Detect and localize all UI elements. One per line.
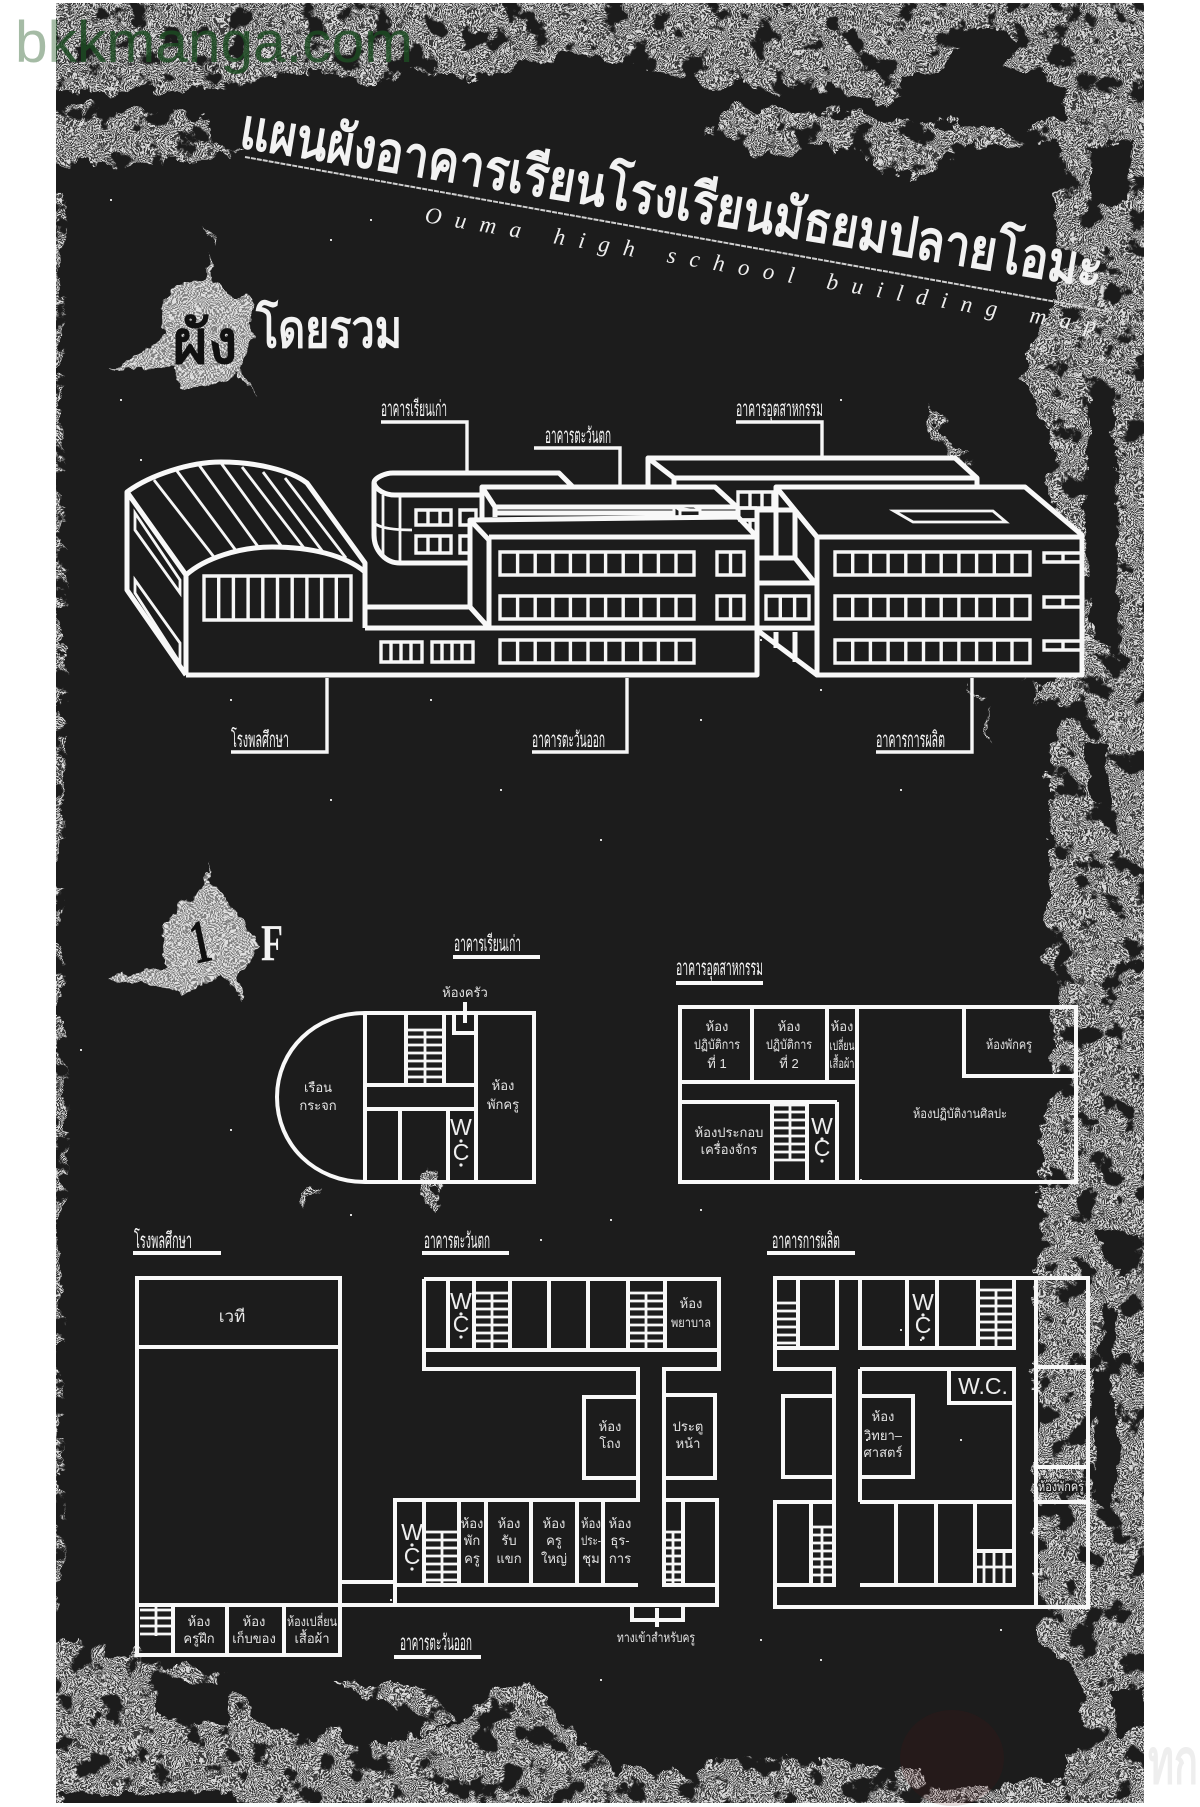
room labels: ศาสตร์ bbox=[864, 1445, 902, 1460]
building: old block bbox=[374, 473, 572, 563]
label: อาคารการผลิต bbox=[772, 1228, 840, 1253]
walls bbox=[680, 1007, 1076, 1182]
building: gymnasium bbox=[127, 462, 757, 675]
room labels: ห้อง bbox=[243, 1614, 265, 1629]
wc: W bbox=[811, 1113, 833, 1139]
room labels: ปฏิบัติการ bbox=[694, 1037, 740, 1052]
icon: ink blot bbox=[107, 860, 258, 1003]
room labels: ห้อง bbox=[498, 1516, 520, 1531]
room labels bbox=[299, 985, 519, 1113]
building: central connector bbox=[738, 487, 817, 628]
room labels: ห้อง bbox=[581, 1516, 601, 1531]
room labels: ห้อง bbox=[492, 1078, 514, 1093]
room labels bbox=[863, 1409, 1084, 1495]
room labels: พักครู bbox=[487, 1097, 519, 1113]
building: industrial block bbox=[648, 458, 977, 560]
wc bbox=[912, 1289, 1008, 1399]
room labels: ห้องครัว bbox=[442, 985, 488, 1000]
room labels: กระจก bbox=[299, 1098, 337, 1113]
wc: W bbox=[401, 1519, 423, 1545]
wc: C bbox=[453, 1311, 469, 1337]
dust specks bbox=[80, 200, 1002, 1680]
callout: production block bbox=[876, 678, 972, 752]
callouts on the perspective drawing bbox=[231, 396, 972, 752]
wc: C bbox=[453, 1139, 469, 1165]
building: production block bbox=[776, 487, 1082, 675]
callout: industrial block bbox=[736, 396, 823, 457]
callout: west block: อาคารตะวันตก bbox=[545, 423, 611, 448]
wc bbox=[811, 1113, 833, 1163]
title rule bbox=[245, 157, 1113, 312]
label bbox=[676, 955, 763, 983]
heading text: F bbox=[261, 915, 283, 972]
floor plan: old block bbox=[277, 931, 540, 1182]
room labels: ห้องพักครู bbox=[986, 1037, 1032, 1053]
callout: production block: อาคารการผลิต bbox=[876, 727, 945, 752]
room labels: ที่ 1 bbox=[707, 1055, 727, 1071]
room labels bbox=[461, 1296, 711, 1646]
room labels: ห้อง bbox=[599, 1419, 621, 1434]
wc: C bbox=[404, 1543, 420, 1569]
stairs bbox=[406, 1030, 444, 1085]
room labels: ห้องปฏิบัติงานศิลปะ bbox=[913, 1106, 1007, 1121]
wc bbox=[450, 1114, 472, 1167]
wc: W bbox=[450, 1114, 472, 1140]
room labels: เวที bbox=[219, 1307, 245, 1326]
room labels: ห้อง bbox=[543, 1516, 565, 1531]
stairs bbox=[426, 1293, 683, 1585]
floor plan: west and east blocks bbox=[340, 1228, 719, 1657]
room labels: ห้อง bbox=[872, 1409, 894, 1424]
room labels: เครื่องจักร bbox=[701, 1141, 757, 1157]
stairs bbox=[772, 1105, 807, 1160]
room labels: รับ bbox=[501, 1533, 517, 1548]
label: east block: อาคารตะวันออก bbox=[400, 1630, 472, 1655]
room labels: ห้อง bbox=[680, 1296, 702, 1311]
heading: first floor bbox=[107, 860, 283, 1003]
room labels: ครูฝึก bbox=[183, 1631, 215, 1647]
icon: ink blot bbox=[107, 253, 256, 396]
label: east block bbox=[394, 1630, 481, 1657]
room labels: ห้อง bbox=[778, 1019, 800, 1034]
room labels: โถง bbox=[599, 1436, 621, 1451]
label: west block bbox=[422, 1228, 509, 1253]
room labels bbox=[183, 1307, 337, 1647]
floor plan: industrial block bbox=[676, 955, 1076, 1182]
subtitle: Ouma high school building map bbox=[423, 202, 1098, 338]
ground line and entrance recess bbox=[186, 628, 1082, 675]
room labels: เสื้อผ้า bbox=[830, 1054, 854, 1071]
room labels: เรือน bbox=[304, 1080, 332, 1095]
wc: W bbox=[912, 1289, 934, 1315]
label: west block: อาคารตะวันตก bbox=[424, 1228, 490, 1253]
room labels: ที่ 2 bbox=[779, 1055, 799, 1071]
room labels: พยาบาล bbox=[671, 1315, 711, 1330]
building: west block bbox=[482, 487, 738, 535]
label: อาคารเรียนเก่า bbox=[454, 931, 521, 956]
room labels: ประตู bbox=[673, 1419, 703, 1435]
watermark: bkkmanga.com: bkkmanga.com bbox=[15, 10, 413, 75]
room labels: ห้อง bbox=[706, 1019, 728, 1034]
heading: overall plan bbox=[107, 253, 402, 396]
room labels: ครู bbox=[464, 1551, 480, 1567]
walls bbox=[277, 1002, 534, 1182]
room labels: วิทยา– bbox=[863, 1428, 903, 1443]
room labels: การ bbox=[609, 1551, 631, 1566]
label: โรงพลศึกษา bbox=[134, 1228, 192, 1253]
floor plan: production block bbox=[767, 1228, 1088, 1607]
callouts on the perspective drawing: อาคารอุตสาหกรรม bbox=[736, 396, 823, 422]
room labels: ห้องประกอบ bbox=[695, 1125, 763, 1140]
callout: old block bbox=[381, 396, 467, 473]
room labels: ทางเข้าสำหรับครู bbox=[617, 1630, 695, 1646]
floor plan: industrial block: อาคารอุตสาหกรรม bbox=[676, 955, 763, 981]
room labels: เก็บของ bbox=[232, 1629, 276, 1646]
label bbox=[453, 931, 540, 957]
callout: east block bbox=[532, 678, 627, 752]
callout: old block: อาคารเรียนเก่า bbox=[381, 396, 447, 421]
callout: east block: อาคารตะวันออก bbox=[532, 727, 605, 752]
perspective drawing of the whole school bbox=[127, 458, 1082, 675]
label bbox=[767, 1228, 855, 1253]
blot label: 1 bbox=[184, 907, 217, 978]
watermark: faint red seal and grey mark bbox=[900, 1710, 1198, 1806]
room labels bbox=[694, 1019, 1032, 1157]
floor plan: gymnasium bbox=[133, 1228, 340, 1655]
room labels: ปฏิบัติการ bbox=[766, 1037, 812, 1052]
wc: C bbox=[915, 1312, 931, 1338]
room labels: ห้อง bbox=[831, 1019, 853, 1034]
watermark: bkkmanga.com: bkkmanga.com bbox=[15, 10, 413, 75]
room labels: ห้องเปลี่ยน bbox=[287, 1613, 337, 1629]
room labels: เสื้อผ้า bbox=[294, 1629, 330, 1646]
teachers' entrance bbox=[632, 1605, 683, 1627]
heading text: โดยรวม bbox=[255, 298, 402, 359]
room labels: ห้องพักครู bbox=[1038, 1479, 1084, 1495]
room labels: เปลี่ยน bbox=[830, 1037, 855, 1053]
wc: W bbox=[450, 1288, 472, 1314]
room labels: ประ- bbox=[581, 1533, 601, 1548]
stairs bbox=[140, 1607, 172, 1636]
room labels: ห้อง bbox=[609, 1516, 631, 1531]
callout: gymnasium bbox=[231, 678, 327, 752]
room labels: แขก bbox=[496, 1551, 522, 1566]
callout: gymnasium: โรงพลศึกษา bbox=[231, 727, 289, 752]
callout: west block bbox=[534, 423, 620, 485]
wc: C bbox=[814, 1135, 830, 1161]
walls bbox=[137, 1278, 340, 1655]
room labels: หน้า bbox=[676, 1436, 700, 1451]
walls bbox=[775, 1278, 1088, 1607]
room labels: ครู bbox=[546, 1533, 562, 1549]
room labels: ห้อง bbox=[461, 1516, 483, 1531]
room labels: ห้อง bbox=[188, 1614, 210, 1629]
blot label: ผัง bbox=[172, 309, 238, 376]
walls bbox=[395, 1279, 719, 1605]
building: east block bbox=[365, 517, 757, 663]
wc: W.C. bbox=[958, 1373, 1008, 1399]
stairs bbox=[775, 1290, 1014, 1585]
room labels: ธุร- bbox=[610, 1533, 630, 1549]
room labels: พัก bbox=[464, 1533, 480, 1548]
room labels: ใหญ่ bbox=[541, 1551, 567, 1566]
room labels: ชุม bbox=[582, 1551, 600, 1567]
wc bbox=[401, 1288, 472, 1571]
